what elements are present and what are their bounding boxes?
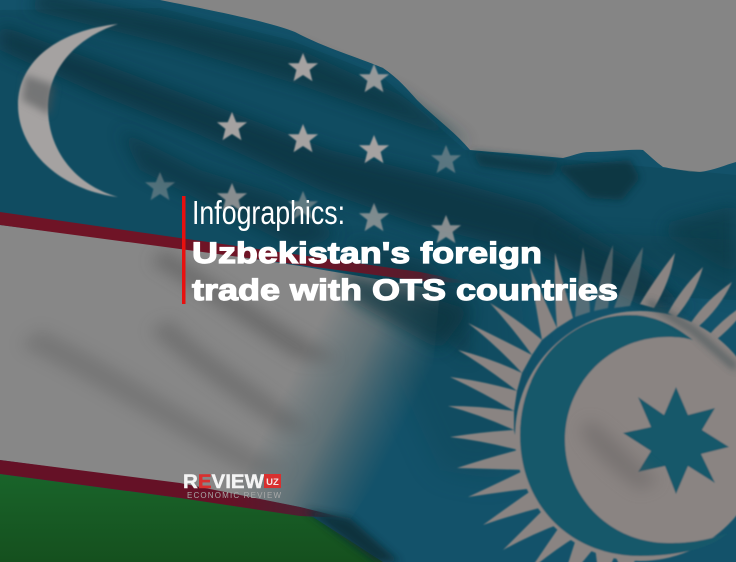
- title accent bar: [182, 196, 186, 304]
- green flag stripe: [0, 474, 383, 562]
- Uzbek flag stars: [145, 53, 461, 243]
- logo tagline: ECONOMIC REVIEW: [187, 491, 281, 500]
- dark shadow by green stripe: [305, 510, 400, 562]
- title line: Infographics: Infographics:: [192, 194, 345, 231]
- logo: [183, 472, 281, 500]
- sun rays: [448, 245, 736, 562]
- soft shadow on sun disc: [580, 420, 660, 490]
- title block: [192, 194, 618, 307]
- white flag stripe: [0, 225, 470, 520]
- title line: trade with OTS countries: trade with OTS countries: [192, 274, 618, 307]
- crescent fold shadow: [22, 75, 55, 115]
- title line: Uzbekistan's foreign: Uzbekistan's foreign: [192, 237, 542, 270]
- eight-pointed star: [623, 387, 729, 494]
- crescent: [520, 315, 728, 556]
- logo UZ badge: UZ: [266, 477, 279, 488]
- top red flag stripe: [0, 212, 480, 284]
- sun disc: [515, 311, 736, 561]
- bottom red flag stripe: [0, 460, 345, 518]
- logo wordmark: REVIEW: [183, 472, 264, 493]
- OTS flag sun emblem: [448, 245, 736, 562]
- Uzbek flag crescent: [18, 24, 118, 197]
- fold shadow over sun: [648, 302, 736, 368]
